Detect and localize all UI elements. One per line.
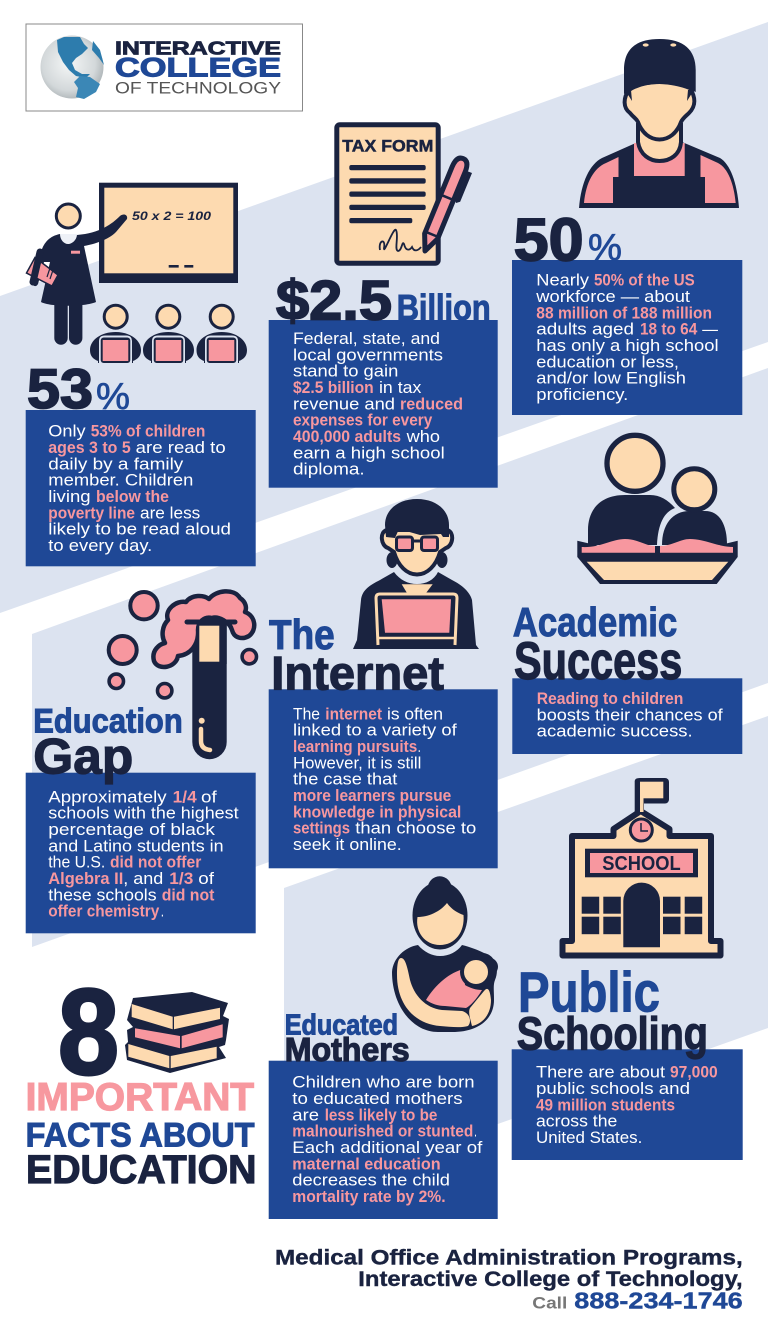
body text: Educated Mothers: to educated mothers: [292, 1089, 463, 1108]
body text: Educated Mothers: less likely to be: [325, 1105, 437, 1124]
body text: Educated Mothers: mortality rate by 2%.: [292, 1187, 446, 1206]
body text: Public Schooling: 97,000: [670, 1063, 718, 1082]
body text: Education Gap: and Latino students in: [48, 836, 224, 855]
body text: $2.5 billion: stand to gain: [293, 362, 398, 381]
body text: $2.5 billion: earn a high school: [293, 443, 445, 462]
body text: Public Schooling: 49 million students: [536, 1095, 675, 1114]
body text: 53%: to every day.: [48, 536, 152, 555]
body text: Public Schooling: There are about: [536, 1063, 665, 1082]
body text: 50%: 50% of the US: [594, 271, 695, 290]
body text: 50%: Nearly: [536, 271, 590, 290]
icon: tax form with pen: [337, 125, 474, 263]
body text: 53%: below the: [96, 487, 169, 506]
body text: Education Gap: Approximately: [48, 787, 167, 806]
heading: Academic Success: [513, 599, 682, 691]
title: 8 Important Facts About Education: FACTS ABOUT: [26, 1116, 255, 1154]
icon: school building: SCHOOL: [602, 853, 681, 875]
icon: tax form with pen: TAX FORM: [342, 137, 433, 156]
body text: Education Gap: these schools: [48, 885, 157, 904]
footer: contact information: 888-234-1746: [574, 1287, 743, 1313]
heading: 53%: [27, 357, 130, 420]
heading: Education Gap: [33, 703, 183, 784]
body text: 53%: Only: [48, 422, 86, 441]
icon: worker in cap and overalls: [579, 39, 739, 208]
heading: Academic Success: Success: [514, 632, 682, 691]
body text: Academic Success: [537, 689, 723, 741]
body text: 53%: member. Children: [48, 471, 193, 490]
heading: Education Gap: Gap: [33, 728, 133, 784]
body text: Education Gap: did not offer: [110, 853, 202, 872]
body text: The Internet: [293, 704, 476, 854]
body text: The Internet: knowledge in physical: [293, 802, 461, 821]
logo: Interactive College of Technology: INTERACTIVE: [115, 38, 281, 58]
icon: teacher at chalkboard with students: [26, 183, 247, 363]
body text: Educated Mothers: [292, 1073, 483, 1206]
icon: mother holding baby: [392, 876, 498, 1032]
body text: Public Schooling: across the: [536, 1112, 617, 1131]
heading: Public Schooling: Schooling: [517, 1007, 708, 1059]
body text: 50%: and/or low English: [536, 369, 686, 388]
body text: The Internet: However, it is still: [293, 753, 421, 772]
heading: $2.5 Billion: [276, 268, 491, 331]
body text: $2.5 billion: who: [406, 427, 440, 446]
body text: Education Gap: schools with the highest: [48, 804, 239, 823]
icon: globe: [40, 36, 104, 99]
icon: stack of books: [125, 992, 229, 1073]
heading: 50%: %: [588, 227, 622, 268]
panel: Academic Success: [512, 599, 742, 754]
panel: The Internet: [269, 611, 498, 868]
heading: Public Schooling: [517, 961, 708, 1059]
icon: person at a laptop with glasses: [353, 499, 479, 649]
body text: Education Gap: [48, 787, 239, 921]
logo: Interactive College of Technology: [26, 24, 302, 111]
body text: 53%: poverty line: [48, 503, 135, 522]
body text: 50%: 88 million of 188 million: [536, 303, 712, 322]
body text: Educated Mothers: .: [474, 1122, 477, 1141]
heading: Public Schooling: Public: [518, 961, 660, 1025]
footer: contact information: Medical Office Administration Programs,: [275, 1245, 743, 1269]
body text: 53%: likely to be read aloud: [48, 520, 231, 539]
body text: 50%: adults aged: [536, 320, 634, 339]
panel: Public Schooling: [512, 961, 743, 1160]
heading: Education Gap: Education: [33, 703, 183, 741]
body text: Education Gap: 1/4: [173, 787, 197, 806]
body text: $2.5 billion: local governments: [293, 345, 443, 364]
body text: The Internet: The: [293, 704, 320, 723]
heading: The Internet: [269, 611, 444, 699]
body text: $2.5 billion: 400,000 adults: [293, 427, 401, 446]
body text: Educated Mothers: malnourished or stunted: [292, 1122, 473, 1141]
body text: The Internet: .: [418, 737, 421, 756]
body text: Education Gap: .: [161, 902, 164, 921]
logo: Interactive College of Technology: COLLEGE: [115, 53, 281, 83]
logo: Interactive College of Technology: OF TECHNOLOGY: [115, 78, 281, 97]
body text: 53%: 53% of children: [91, 422, 205, 441]
body text: The Internet: internet: [325, 704, 382, 723]
panel: $2.5 Billion: [269, 268, 498, 488]
body text: The Internet: learning pursuits: [293, 737, 417, 756]
body text: $2.5 billion: in tax: [379, 378, 422, 397]
heading: Educated Mothers: Educated: [285, 1009, 398, 1041]
heading: 50%: [514, 207, 622, 274]
panel: 50%: [512, 207, 742, 415]
body text: 50%: proficiency.: [536, 385, 628, 404]
heading: $2.5 Billion: Billion: [397, 287, 491, 328]
body text: 50%: has only a high school: [536, 336, 719, 355]
body text: $2.5 billion: [293, 329, 463, 479]
icon: teacher at chalkboard with students: 50 x 2 = 100: [132, 209, 211, 223]
body text: 50%: [535, 271, 719, 404]
body text: $2.5 billion: Federal, state, and: [293, 329, 440, 348]
title: 8 Important Facts About Education: 8: [58, 964, 119, 1100]
heading: Educated Mothers: [285, 1009, 410, 1068]
body text: Education Gap: of: [201, 787, 217, 806]
body text: 50%: 18 to 64: [640, 320, 698, 339]
heading: 53%: %: [96, 376, 130, 417]
body text: Educated Mothers: Each additional year of: [292, 1138, 483, 1157]
body text: Education Gap: of: [198, 869, 214, 888]
icon: school building: [562, 778, 720, 956]
icon: parent and child reading a book: [577, 435, 738, 584]
body text: Education Gap: 1/3: [169, 869, 193, 888]
body text: 50%: education or less,: [536, 352, 679, 371]
title: 8 Important Facts About Education: [26, 964, 256, 1192]
title: 8 Important Facts About Education: EDUCATION: [26, 1148, 256, 1192]
title: 8 Important Facts About Education: IMPORTANT: [26, 1076, 254, 1119]
body text: Public Schooling: [536, 1063, 718, 1147]
body text: 53%: [48, 422, 231, 555]
body text: Education Gap: Algebra II: [48, 869, 123, 888]
body text: Educated Mothers: maternal education: [292, 1154, 441, 1173]
footer: contact information: [275, 1245, 743, 1313]
heading: $2.5 Billion: $2.5: [276, 268, 392, 331]
body text: Educated Mothers: Children who are born: [292, 1073, 475, 1092]
body text: 53%: ages 3 to 5: [48, 438, 131, 457]
icon: test tube with foam and bubbles: [109, 591, 256, 759]
footer: contact information: Call: [532, 1293, 567, 1312]
body text: The Internet: than choose to: [355, 819, 476, 838]
body text: $2.5 billion: $2.5 billion: [293, 378, 374, 397]
body text: The Internet: the case that: [293, 770, 398, 789]
heading: Educated Mothers: Mothers: [285, 1031, 410, 1068]
heading: The Internet: The: [269, 611, 335, 658]
body text: 53%: living: [48, 487, 91, 506]
body text: Education Gap: offer chemistry: [48, 902, 160, 921]
body text: Public Schooling: public schools and: [536, 1079, 690, 1098]
heading: The Internet: Internet: [271, 646, 444, 699]
body text: The Internet: seek it online.: [293, 835, 402, 854]
body text: Education Gap: did not: [162, 885, 215, 904]
body text: 50%: —: [702, 320, 718, 339]
body text: Academic Success: boosts their chances of: [537, 705, 723, 724]
body text: The Internet: more learners pursue: [293, 786, 451, 805]
body text: Educated Mothers: decreases the child: [292, 1171, 450, 1190]
body text: $2.5 billion: expenses for every: [293, 411, 433, 430]
footer: contact information: Interactive College of Technology,: [358, 1267, 743, 1291]
body text: The Internet: linked to a variety of: [293, 721, 457, 740]
heading: Academic Success: Academic: [513, 599, 677, 645]
heading: 53%: 53: [27, 357, 93, 420]
body text: The Internet: is often: [387, 704, 443, 723]
body text: Public Schooling: United States.: [536, 1128, 642, 1147]
body text: Education Gap: percentage of black: [48, 820, 216, 839]
panel: 53%: [26, 357, 256, 566]
heading: 50%: 50: [514, 207, 584, 274]
panel: Education Gap: [26, 703, 256, 933]
body text: 53%: daily by a family: [48, 454, 184, 473]
body text: $2.5 billion: reduced: [400, 394, 463, 413]
body text: Academic Success: Reading to children: [537, 689, 683, 708]
panel: Educated Mothers: [269, 1009, 498, 1219]
body text: Education Gap: , and: [123, 869, 163, 888]
body text: $2.5 billion: diploma.: [293, 460, 365, 479]
body text: Education Gap: the U.S.: [48, 853, 105, 872]
body text: Educated Mothers: are: [292, 1105, 319, 1124]
body text: 53%: are read to: [136, 438, 226, 457]
body text: Academic Success: academic success.: [537, 722, 693, 741]
body text: $2.5 billion: revenue and: [293, 394, 395, 413]
body text: 53%: are less: [140, 503, 200, 522]
body text: The Internet: settings: [293, 819, 350, 838]
body text: 50%: workforce — about: [535, 287, 690, 306]
